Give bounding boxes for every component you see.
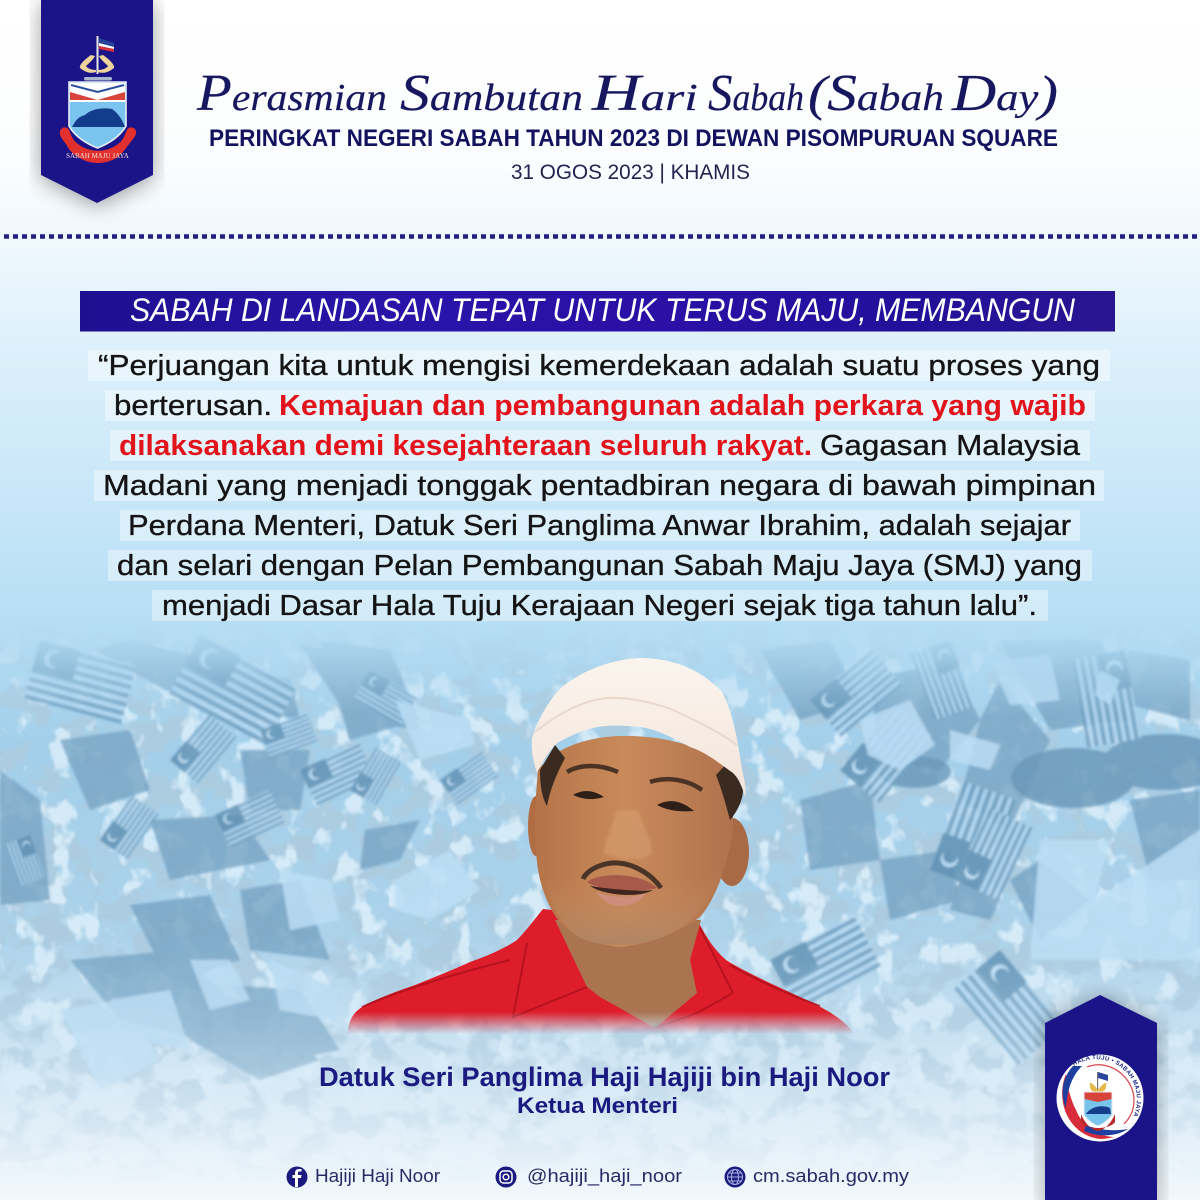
hair xyxy=(540,745,743,820)
social media footer xyxy=(286,1166,909,1188)
quote text block xyxy=(88,350,1110,622)
date: 31 OGOS 2023 | KHAMIS xyxy=(511,161,750,184)
quote text block: berterusan. xyxy=(114,390,272,422)
icon: Sabah Maju Jaya logo: HALA TUJU • SABAH MAJU JAYA xyxy=(1072,1054,1141,1116)
neck xyxy=(555,920,701,1028)
instagram xyxy=(496,1166,682,1188)
flags xyxy=(5,635,1141,1065)
chin shade xyxy=(554,905,697,945)
script title: Perasmian xyxy=(196,65,387,122)
script title: Sambutan xyxy=(400,65,583,122)
top-left banner with state crest xyxy=(41,0,153,206)
quote text block: Madani yang menjadi tonggak pentadbiran negara di bawah pimpinan xyxy=(103,470,1096,502)
eyes and brows xyxy=(567,766,702,811)
headline text: SABAH DI LANDASAN TEPAT UNTUK TERUS MAJU, MEMBANGUN xyxy=(130,292,1076,328)
quote text block: Kemajuan dan pembangunan adalah perkara yang wajib xyxy=(279,390,1086,422)
quote text block: menjadi Dasar Hala Tuju Kerajaan Negeri sejak tiga tahun lalu”. xyxy=(162,590,1037,622)
banner shape xyxy=(41,0,153,203)
facebook: Hajiji Haji Noor xyxy=(315,1166,440,1186)
cap xyxy=(532,658,746,797)
script title: (Sabah xyxy=(808,65,944,122)
face xyxy=(535,736,733,947)
headline bar xyxy=(80,291,1115,332)
icon: Sabah Maju Jaya logo xyxy=(1056,1054,1144,1142)
moustache xyxy=(583,863,661,888)
quote text block: dilaksanakan demi kesejahteraan seluruh rakyat. xyxy=(119,430,812,462)
shirt xyxy=(347,909,856,1036)
instagram: @hajiji_haji_noor xyxy=(527,1166,682,1187)
cap seam xyxy=(535,698,737,745)
banner shadow xyxy=(1045,995,1157,1200)
icon: Sabah state crest: SABAH MAJU JAYA xyxy=(66,152,129,160)
title block xyxy=(196,65,1058,184)
subtitle: PERINGKAT NEGERI SABAH TAHUN 2023 DI DEWAN PISOMPURUAN SQUARE xyxy=(209,125,1058,152)
collars and shirt seams xyxy=(362,928,820,1028)
script title: Day) xyxy=(951,65,1058,122)
quote text block: Perdana Menteri, Datuk Seri Panglima Anwar Ibrahim, adalah sejajar xyxy=(128,510,1071,542)
nose xyxy=(604,810,652,859)
light hands and shirts xyxy=(60,655,1200,1090)
script title: H ari xyxy=(591,65,698,122)
lips xyxy=(587,875,657,906)
portrait of Chief Minister xyxy=(347,658,856,1036)
icon: Sabah state crest xyxy=(60,36,136,163)
quote text block: dan selari dengan Pelan Pembangunan Sabah Maju Jaya (SMJ) yang xyxy=(117,550,1082,582)
quote text block: “Perjuangan kita untuk mengisi kemerdekaan adalah suatu proses yang xyxy=(98,350,1100,382)
script title: Sabah xyxy=(708,65,804,122)
ears xyxy=(528,796,536,856)
name: Datuk Seri Panglima Haji Hajiji bin Haji Noor xyxy=(319,1062,890,1092)
banner shadow xyxy=(41,3,153,206)
website: cm.sabah.gov.my xyxy=(753,1166,909,1186)
background photo: crowd waving flags xyxy=(0,625,1200,1185)
quote text block: Gagasan Malaysia xyxy=(820,430,1081,462)
bottom-right banner with Hala Tuju logo xyxy=(1034,986,1168,1200)
dark silhouettes xyxy=(0,640,1200,1080)
script title xyxy=(196,65,1058,122)
position: Ketua Menteri xyxy=(517,1093,678,1118)
name and position xyxy=(319,1062,890,1118)
banner shape xyxy=(1045,995,1157,1200)
